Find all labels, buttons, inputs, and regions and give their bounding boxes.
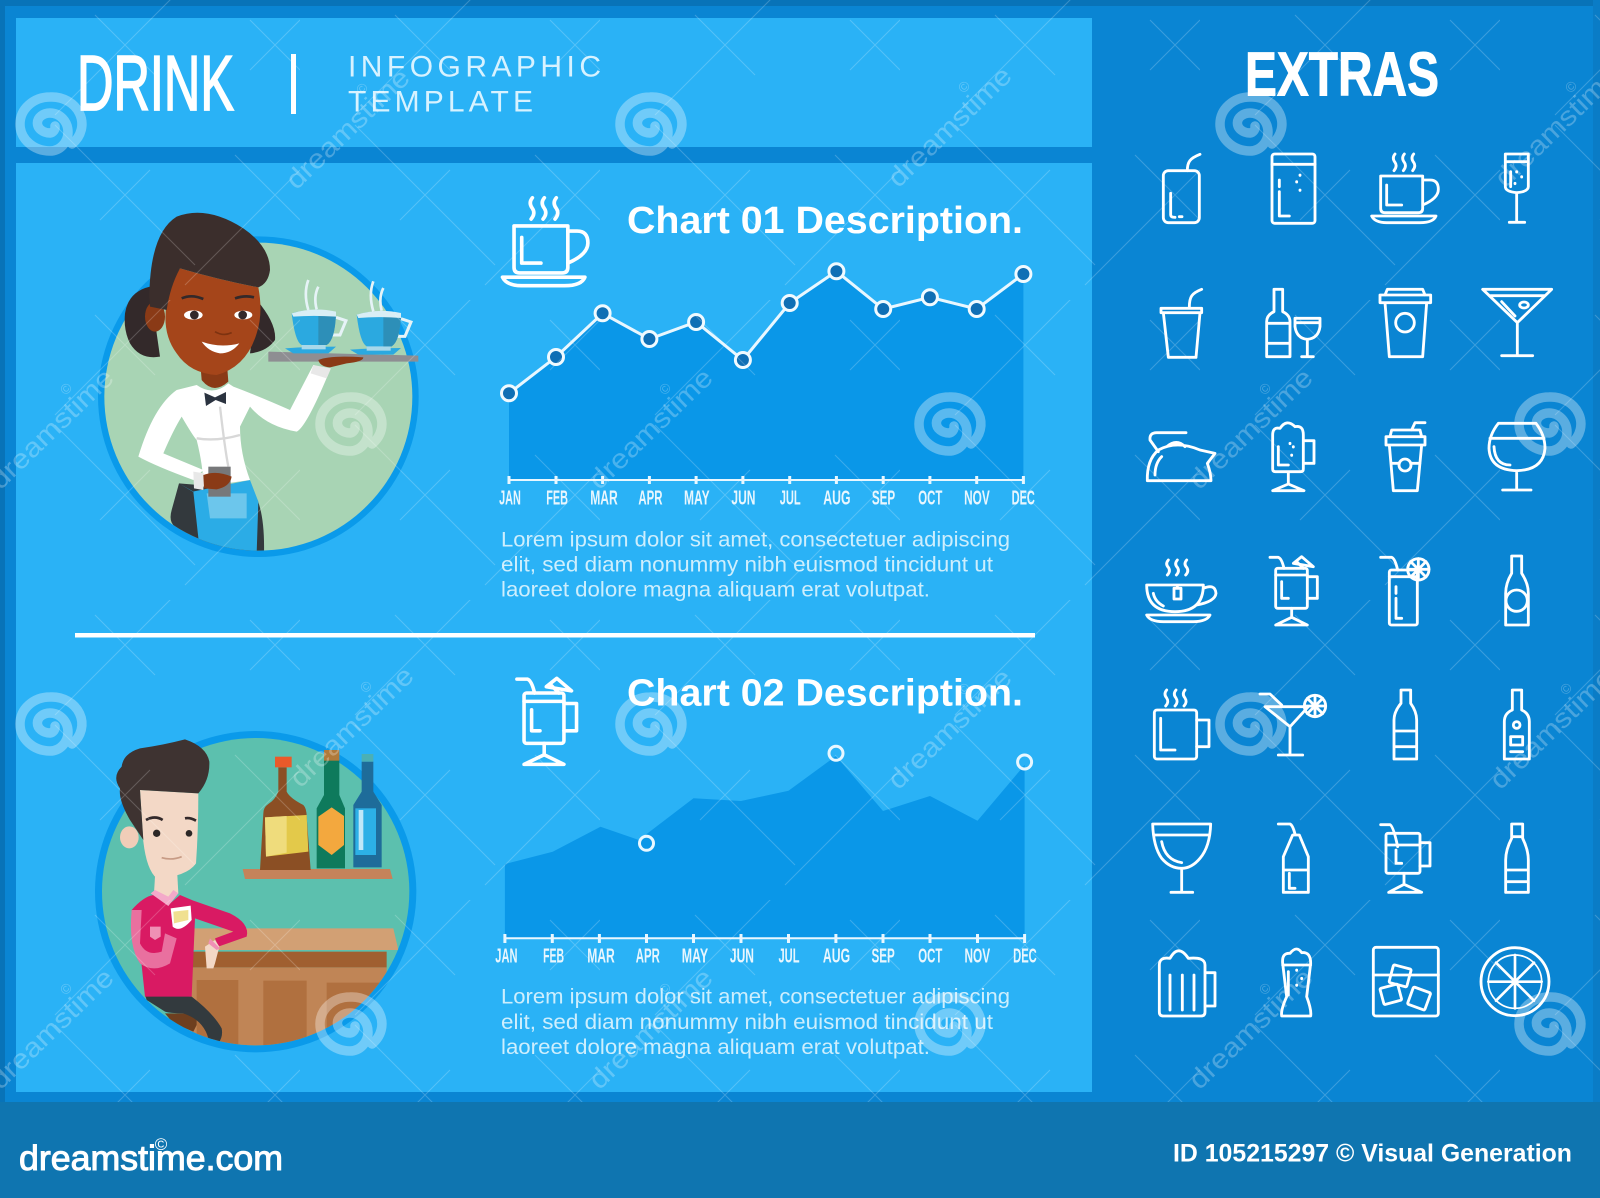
watermark text: dreamstime <box>1183 362 1319 495</box>
month labels chart 1: JUL <box>780 488 801 510</box>
body text chart 2: Lorem ipsum dolor sit amet, consectetuer adipiscing <box>501 985 1010 1008</box>
icon: balloon glass <box>1489 423 1545 490</box>
icon: glass of water <box>1272 154 1315 223</box>
icon: martini <box>1483 289 1552 356</box>
footer logo: © <box>155 1135 168 1154</box>
watermark text: dreamstime <box>583 962 719 1095</box>
icons rows 1 to 3 <box>1147 154 1552 491</box>
watermark text: dreamstime <box>583 362 719 495</box>
body text chart 1: laoreet dolore magna aliquam erat volutpat. <box>501 579 930 602</box>
month labels chart 2: OCT <box>918 946 942 968</box>
icon: champagne flute <box>1505 154 1528 222</box>
watermark spirals <box>20 97 1581 1051</box>
month labels chart 2: NOV <box>964 946 990 968</box>
main panel <box>16 163 1092 1092</box>
watermark text: © <box>353 79 372 98</box>
icon: tall glass with lemon <box>1381 557 1429 625</box>
watermark text: © <box>357 677 376 696</box>
panel: extras icons <box>1147 154 1552 1016</box>
body text chart 2: laoreet dolore magna aliquam erat volutpat. <box>501 1036 930 1059</box>
icon: tea cup <box>1147 560 1216 622</box>
month labels chart 2: DEC <box>1013 946 1037 968</box>
icon: beer bottle <box>1506 556 1528 625</box>
icon: soda cup <box>1161 289 1202 357</box>
subtitle: INFOGRAPHIC <box>348 50 601 84</box>
icon: takeaway coffee <box>1380 289 1431 357</box>
watermark text: dreamstime <box>280 62 416 195</box>
chart 1: area line chart <box>499 264 1035 510</box>
icon: mug <box>1154 690 1209 759</box>
title: drink: DRINK <box>77 39 234 127</box>
month labels chart 1: APR <box>638 488 663 510</box>
watermark text: © <box>656 979 675 998</box>
watermark text: dreamstime <box>284 660 420 793</box>
icon: coffee cup chart 1 <box>503 198 588 286</box>
month labels chart 2 <box>495 946 1037 968</box>
month labels chart 1: FEB <box>546 488 568 510</box>
chart title 01: Chart 01 Description. <box>627 200 1023 242</box>
illustration: man at bar <box>95 731 416 1052</box>
icon: liquor bottle <box>1504 690 1529 759</box>
watermark text: © <box>1557 679 1576 698</box>
icon: bottle and wine glass <box>1267 289 1320 357</box>
watermark text: © <box>57 379 76 398</box>
icon: irish coffee chart 2 <box>517 678 577 764</box>
watermark text: © <box>1256 979 1275 998</box>
icon: bottle with straw <box>1278 824 1308 892</box>
footer logo: dreamstime.com <box>19 1139 283 1178</box>
month labels chart 1: NOV <box>964 488 990 510</box>
subtitle <box>348 50 601 118</box>
month labels chart 1: SEP <box>872 488 895 510</box>
watermark text: dreamstime <box>882 60 1018 193</box>
illustration: waitress with tray <box>98 213 419 557</box>
watermark text: dreamstime <box>882 662 1018 795</box>
watermark text: © <box>955 679 974 698</box>
watermark text: © <box>955 77 974 96</box>
month labels chart 1: MAY <box>684 488 710 510</box>
month labels chart 1: JUN <box>731 488 756 510</box>
month labels chart 2: MAR <box>587 946 615 968</box>
icon: kettle <box>1147 433 1215 481</box>
month labels chart 2: JUN <box>730 946 754 968</box>
chart title 02: Chart 02 Description. <box>627 673 1023 715</box>
title divider <box>291 54 296 114</box>
icon: lemon slice <box>1481 948 1549 1016</box>
month labels chart 1: DEC <box>1012 488 1035 510</box>
month labels chart 2: JAN <box>495 946 518 968</box>
month labels chart 1: MAR <box>590 488 618 510</box>
icon: irish mug with foam <box>1273 423 1314 491</box>
watermark text: © <box>57 979 76 998</box>
icons rows 4 to 7 <box>1147 556 1549 1016</box>
month labels chart 1: OCT <box>918 488 942 510</box>
month labels chart 2: APR <box>636 946 660 968</box>
watermark text: © <box>656 379 675 398</box>
icon: takeaway cup with straw <box>1386 423 1425 491</box>
footer bar <box>0 1102 1600 1198</box>
month labels chart 1: JAN <box>499 488 521 510</box>
icon: can with straw <box>1163 154 1200 223</box>
chart 2: area chart <box>495 746 1037 968</box>
month labels chart 2: JUL <box>778 946 800 968</box>
icon: whisky on ice <box>1373 947 1438 1016</box>
heading: extras: EXTRAS <box>1245 41 1439 110</box>
watermark text: © <box>1562 77 1581 96</box>
month labels chart 1: AUG <box>823 488 850 510</box>
footer credit: ID 105215297 © Visual Generation <box>1173 1140 1572 1168</box>
month labels chart 2: SEP <box>872 946 895 968</box>
icon: cocktail mug <box>1270 557 1317 625</box>
icon: champagne bottle <box>1506 824 1528 892</box>
icon: pint glass <box>1282 949 1311 1016</box>
body text chart 2 <box>501 985 1010 1059</box>
body text chart 2: elit, sed diam nonummy nibh euismod tincidunt ut <box>501 1011 993 1034</box>
icon: wine goblet <box>1153 824 1211 892</box>
section divider <box>75 633 1035 638</box>
header panel <box>16 18 1092 147</box>
month labels chart 1 <box>499 488 1035 510</box>
month labels chart 2: MAY <box>682 946 709 968</box>
subtitle: TEMPLATE <box>348 86 533 118</box>
body text chart 1: Lorem ipsum dolor sit amet, consectetuer adipiscing <box>501 529 1010 552</box>
icon: cocktail with lemon <box>1260 694 1326 755</box>
icon: beer mug <box>1159 951 1215 1016</box>
watermark text: dreamstime <box>1183 962 1319 1095</box>
icon: glass mug with straw <box>1381 825 1430 892</box>
watermark text: © <box>1256 379 1275 398</box>
month labels chart 2: AUG <box>823 946 850 968</box>
month labels chart 2: FEB <box>543 946 564 968</box>
icon: bottle <box>1394 690 1417 759</box>
body text chart 1: elit, sed diam nonummy nibh euismod tincidunt ut <box>501 554 993 577</box>
icon: cup and saucer <box>1372 154 1438 223</box>
body text chart 1 <box>501 529 1010 602</box>
